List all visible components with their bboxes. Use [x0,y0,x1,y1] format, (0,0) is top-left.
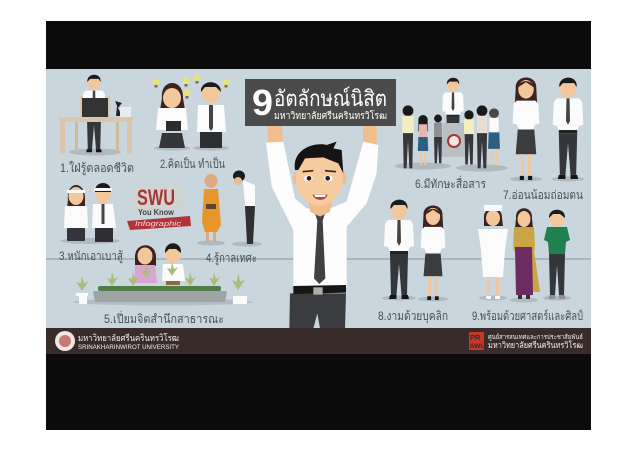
PR office name: ศูนย์สารสนเทศและการประชาสัมพันธ์ [488,333,583,341]
university name [78,333,179,351]
item 1: desk illustration [59,75,133,156]
title sign: อัตลักษณ์นิสิต [274,86,387,111]
item 4: monk and bowing student [197,170,262,246]
badge: SWU You Know Infographic: You Know [138,208,175,217]
item 3: students with headbands [60,183,120,244]
title sign: 9 [252,82,273,123]
badge: SWU You Know Infographic: SWU [137,185,175,210]
item 5: planting scene [73,243,253,306]
footer bar [46,328,591,354]
label 1: 1.ใฝ่รู้ตลอดชีวิต [60,161,134,176]
PR logo: PR [470,333,481,342]
title sign: มหาวิทยาลัยศรีนครินทรวิโรฒ [274,109,387,122]
panel: light blue background [46,69,591,328]
label 9: 9.พร้อมด้วยศาสตร์และศิลป์ [472,309,583,323]
label 2: 2.คิดเป็น ทำเป็น [160,156,225,171]
university name: SRINAKHARINWIROT UNIVERSITY [78,345,179,351]
item 7: polite greeting pair [510,77,584,182]
label 6: 6.มีทักษะสื่อสาร [415,175,486,191]
item 8: well-mannered pair [382,200,448,302]
PR office name: มหาวิทยาลัยศรีนครินทรวิโรฒ [488,340,583,350]
badge: SWU You Know Infographic [127,184,191,230]
title sign [245,79,396,126]
item 2: thinking students [152,74,230,150]
label 4: 4.รู้กาลเทศะ [206,251,257,266]
black slide frame [46,21,591,430]
PR logo: SWU [470,343,485,350]
label 3: 3.หนักเอาเบาสู้ [59,249,124,264]
PR logo [469,332,485,350]
badge: SWU You Know Infographic: Infographic [135,221,182,228]
label 7: 7.อ่อนน้อมถ่อมตน [503,188,583,202]
PR office name [488,333,583,350]
university name: มหาวิทยาลัยศรีนครินทรวิโรฒ [78,333,179,343]
item 6: presenter and audience [395,78,508,172]
label 5: 5.เปี่ยมจิตสำนึกสาธารณะ [104,310,224,326]
university logo [55,331,75,351]
label 8: 8.งามด้วยบุคลิก [378,309,448,324]
main character holding sign [266,123,378,328]
item 9: nurse, traditional dress, green shirt [478,205,571,302]
